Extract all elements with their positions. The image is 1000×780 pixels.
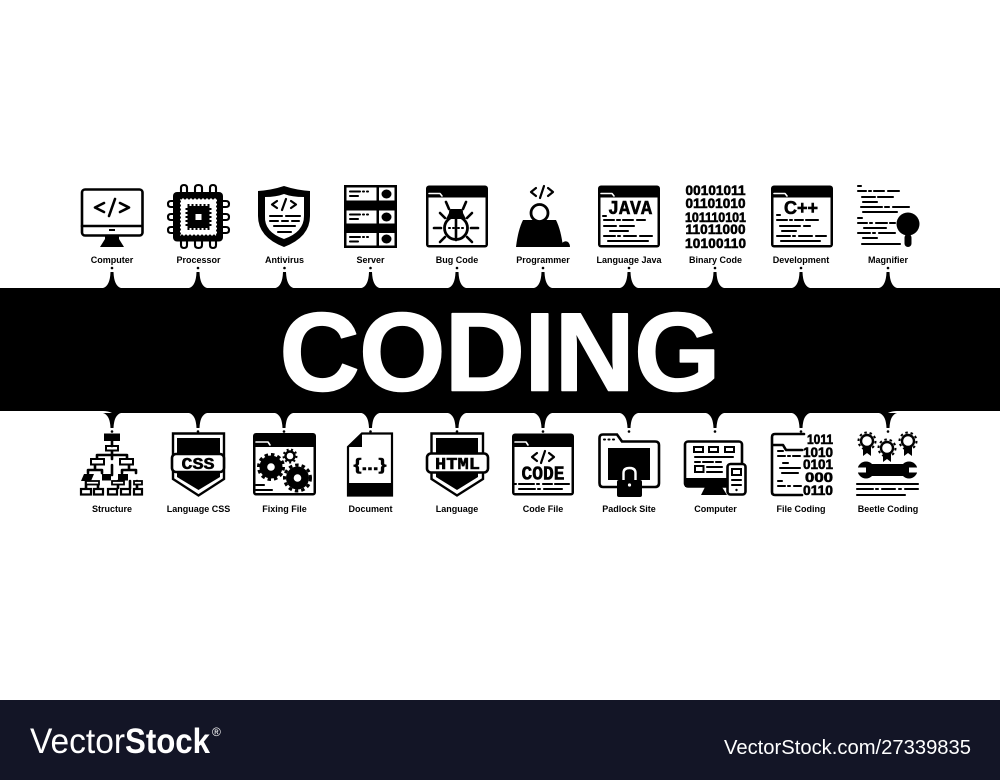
- connector: [362, 267, 380, 288]
- label: Fixing File: [262, 504, 307, 514]
- icon: HTML shield: HTML: [435, 456, 480, 475]
- icon: binary digits: 10100110: [685, 236, 746, 251]
- connector: [103, 267, 121, 288]
- label: Processor: [176, 255, 221, 265]
- icon: hierarchy tree: [81, 434, 142, 494]
- label: Server: [356, 255, 385, 265]
- item: Document: [348, 413, 393, 514]
- connector: [534, 413, 552, 433]
- item: Programmer: [516, 186, 570, 288]
- icon: Java window: JAVA: [608, 198, 653, 220]
- item: Magnifier: [858, 186, 920, 288]
- icon: CSS shield: CSS: [182, 456, 214, 475]
- label: Document: [348, 504, 393, 514]
- icon: server rack: [344, 185, 397, 248]
- icon: awards and wrench: [856, 432, 919, 495]
- icon: window with gears: [253, 433, 316, 496]
- label: Binary Code: [689, 255, 742, 265]
- connector: [706, 413, 724, 433]
- icon: folder with binary: 1011: [807, 431, 833, 447]
- label: Bug Code: [436, 255, 478, 265]
- item: Beetle Coding: [856, 413, 919, 514]
- logo wordmark: [30, 722, 221, 761]
- connector: [534, 267, 552, 288]
- item: Antivirus: [258, 186, 310, 288]
- connector: [189, 413, 207, 433]
- icon: monitor with code: [82, 190, 142, 247]
- icon: chip: [168, 185, 229, 248]
- label: Structure: [92, 504, 132, 514]
- icon: shield: [258, 186, 310, 247]
- item: Language CSS: [167, 413, 230, 514]
- icon: person with code: [516, 186, 570, 247]
- connector: [448, 413, 466, 433]
- label: Programmer: [516, 255, 570, 265]
- item: Language: [427, 413, 488, 514]
- connector: [879, 413, 897, 433]
- connector: [275, 413, 293, 433]
- icon: folder with binary: 0101: [803, 456, 833, 472]
- label: Beetle Coding: [858, 504, 918, 514]
- icon: monitor and phone: [685, 442, 746, 495]
- item: Code File: [512, 413, 574, 514]
- item: Computer (devices): [685, 413, 746, 514]
- central black band: [0, 288, 1000, 413]
- icon: binary digits: 101110101: [685, 210, 746, 225]
- icon: folder with binary: 000: [805, 469, 833, 485]
- label: Code File: [523, 504, 563, 514]
- item: Binary Code: [685, 183, 746, 288]
- item: Processor: [168, 185, 229, 288]
- connector: [792, 267, 810, 288]
- image id: VectorStock.com/27339835: [724, 737, 971, 759]
- item: Server: [344, 185, 397, 288]
- icon: binary digits: 00101011: [686, 183, 746, 198]
- icon: binary digits: [685, 183, 746, 251]
- connector: [620, 267, 638, 288]
- item: Bug Code: [426, 186, 488, 288]
- logo wordmark: ®: [212, 725, 221, 739]
- connector: [362, 413, 380, 433]
- icon: folder with padlock: [600, 434, 659, 497]
- icon: C++ window: C++: [784, 198, 818, 218]
- label: Computer: [694, 504, 737, 514]
- connector: [448, 267, 466, 288]
- label: Antivirus: [265, 255, 304, 265]
- label: File Coding: [776, 504, 826, 514]
- connector: [620, 413, 638, 433]
- item: Fixing File: [253, 413, 316, 514]
- label: Language CSS: [167, 504, 230, 514]
- label: Padlock Site: [602, 504, 656, 514]
- item: Structure: [81, 413, 142, 514]
- title: CODING: [280, 290, 720, 414]
- label: Computer: [91, 255, 134, 265]
- connector: [879, 267, 897, 288]
- icon: browser window with bug: [426, 186, 488, 248]
- logo wordmark: Vector: [30, 722, 125, 761]
- item: Language Java: [596, 186, 663, 288]
- label: Language: [436, 504, 478, 514]
- label: Development: [773, 255, 829, 265]
- item: File Coding: [772, 413, 833, 514]
- logo wordmark: Stock: [125, 722, 210, 761]
- label: Language Java: [596, 255, 663, 265]
- item: Padlock Site: [600, 413, 659, 514]
- footer bar: [0, 700, 1000, 780]
- icon: binary digits: 01101010: [686, 196, 746, 211]
- connector: [792, 413, 810, 433]
- label: Magnifier: [868, 255, 908, 265]
- item: Computer: [82, 190, 142, 288]
- item: Development: [771, 186, 833, 288]
- icon: code document: {...}: [354, 455, 387, 474]
- icon: code lines with magnifier: [858, 186, 920, 247]
- connector: [276, 267, 294, 288]
- connector: [103, 413, 121, 433]
- icon: binary digits: 11011000: [686, 222, 746, 237]
- icon: folder with binary: 0110: [803, 482, 833, 498]
- icon: code window: CODE: [522, 464, 564, 486]
- connector: [706, 267, 724, 288]
- icon: folder with binary: 1010: [803, 444, 833, 460]
- connector: [189, 267, 207, 288]
- icon: folder with binary: [772, 431, 833, 498]
